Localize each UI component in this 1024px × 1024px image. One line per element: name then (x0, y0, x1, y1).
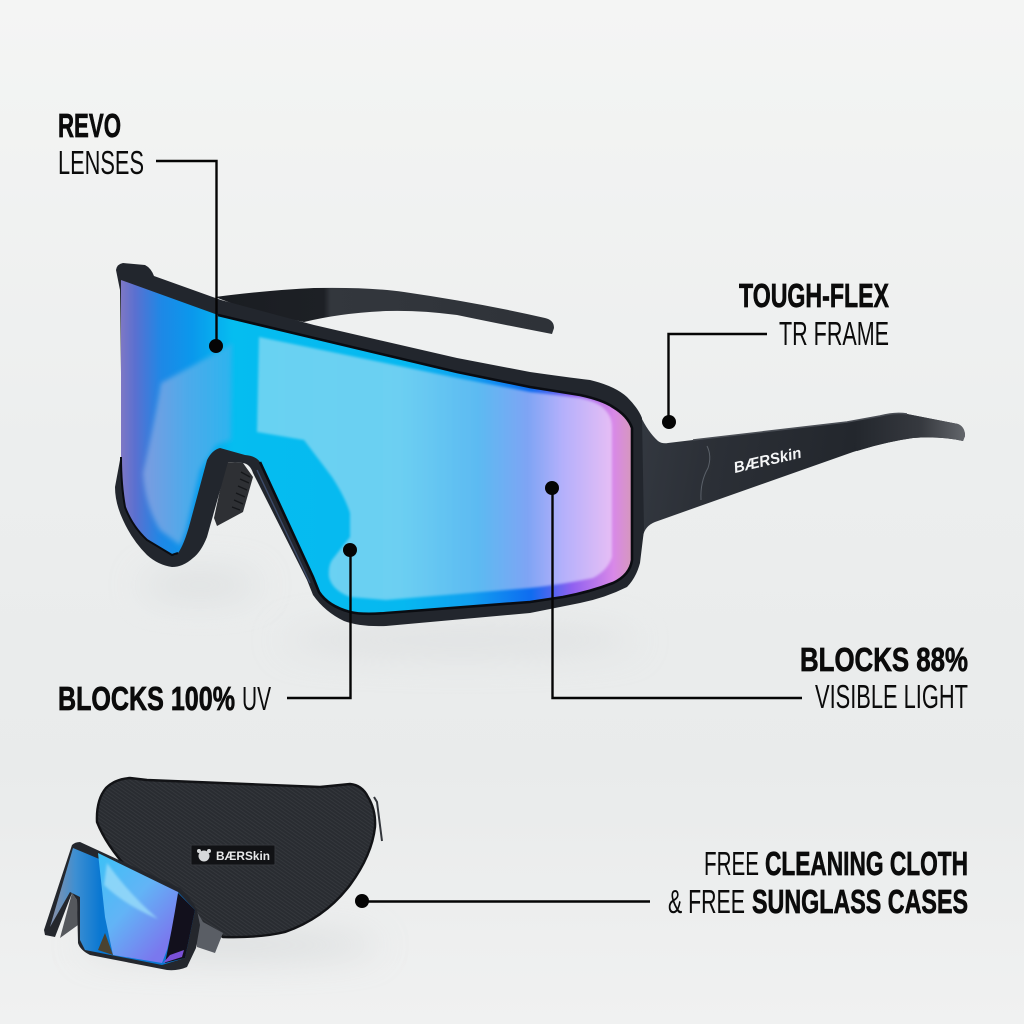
case (97, 778, 375, 937)
callout: free cloth and cases (355, 845, 968, 920)
small sunglasses nose pad (60, 893, 78, 938)
case badge (191, 845, 275, 865)
callout: blocks 100% uv: BLOCKS 100% (58, 680, 235, 717)
callout: blocks 88% visible light: BLOCKS 88% (800, 641, 968, 678)
temple hinge seam (701, 446, 710, 500)
callout: blocks 100% uv: UV (242, 680, 271, 717)
nose pad (214, 462, 253, 526)
frame (115, 263, 644, 626)
frame left lower black rim (121, 457, 178, 555)
lens reflection: left panel (143, 343, 232, 545)
lens black rim (218, 315, 632, 614)
small sunglasses temple stub (190, 900, 223, 953)
temple logo: BÆRSkin (732, 445, 803, 477)
callout: tough-flex frame: TR FRAME (779, 315, 889, 352)
far temple arm (215, 288, 554, 334)
small sunglasses frame (44, 842, 200, 970)
small lens dark corner (165, 893, 195, 963)
lens reflection: bright centre panel (257, 337, 612, 600)
case badge: BÆRSkin (216, 849, 270, 863)
callout: tough-flex frame: TOUGH-FLEX (739, 277, 889, 314)
temple tip (852, 413, 965, 451)
small sunglasses lens (50, 848, 195, 965)
case zipper pull (374, 797, 382, 841)
carrying case and small sunglasses (44, 778, 382, 970)
callout: tough-flex frame (662, 277, 889, 429)
callout: revo lenses: REVO (58, 107, 121, 144)
callout: free cloth and cases: & FREE (668, 883, 745, 920)
callout: revo lenses (58, 107, 223, 353)
small lens bright panel (98, 853, 179, 963)
main sunglasses (110, 263, 965, 626)
temple top highlight (693, 413, 907, 440)
callout: blocks 88% visible light (545, 481, 968, 715)
small lens reflection (104, 863, 158, 919)
bear logo (197, 849, 211, 862)
lens (110, 270, 640, 620)
near temple arm (610, 413, 965, 536)
soft product shadows (80, 573, 640, 957)
callout: revo lenses: LENSES (58, 144, 144, 181)
callout: free cloth and cases: FREE (704, 845, 759, 882)
small lens violet sliver (163, 950, 184, 963)
callout: blocks 100% uv (58, 543, 357, 717)
small lens bronze corner (98, 933, 113, 955)
frame nose edge highlight (257, 470, 310, 583)
